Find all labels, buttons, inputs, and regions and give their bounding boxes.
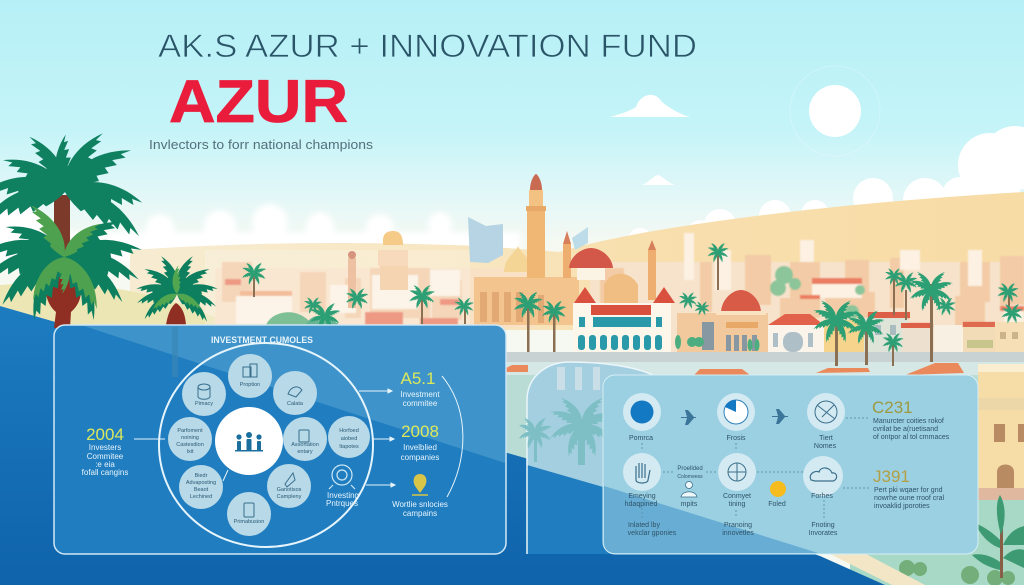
label: investing principles: Investing xyxy=(327,491,359,500)
segment labels: entary xyxy=(297,449,313,455)
segment labels: Beaot xyxy=(194,487,209,493)
stat: J391: invoaklid jporoties xyxy=(874,503,930,510)
segment labels: Advaposting xyxy=(186,480,216,486)
step labels xyxy=(625,435,838,537)
segment labels: Calata xyxy=(287,401,304,407)
step labels: hdaqpined xyxy=(625,501,657,508)
cloud: small upper xyxy=(610,95,690,117)
segment labels: aiobed xyxy=(341,436,357,442)
distant city xyxy=(215,233,1024,358)
waterfront roofs and boats xyxy=(506,363,964,375)
segment labels: noining xyxy=(181,435,199,441)
mosque complex xyxy=(474,174,656,325)
garden at bottom right xyxy=(850,500,1024,585)
icon: globe target xyxy=(728,463,746,481)
plant bottom right xyxy=(972,495,1024,578)
step labels: innovetles xyxy=(722,530,754,537)
step labels: Tiert xyxy=(819,435,833,442)
segment labels: Assortation xyxy=(291,442,319,448)
palm tree: front xyxy=(0,199,143,328)
label: investing principles xyxy=(326,491,359,508)
segment circles xyxy=(168,354,370,536)
far hills xyxy=(130,192,1024,330)
segment labels: Proption xyxy=(240,382,260,388)
stat: 2004: :e eia xyxy=(95,460,115,469)
faded trunk behind glass xyxy=(172,327,178,377)
stat: J391 xyxy=(873,467,944,510)
stat: worldwide: Wortlie snlocies xyxy=(392,500,448,509)
icon: cloud xyxy=(810,468,837,481)
stat: worldwide xyxy=(392,500,448,518)
stat: 2008: Invelblied xyxy=(403,443,437,452)
sun xyxy=(790,66,880,156)
palace with teal arches xyxy=(573,287,675,353)
ring xyxy=(159,343,373,547)
cloud: tiny xyxy=(642,175,675,185)
stat: J391: Pert pki wqaer for gnd xyxy=(874,487,943,494)
panel light diagonal overlay xyxy=(84,326,505,463)
stat: J391: J391 xyxy=(873,467,910,486)
street xyxy=(506,352,1024,375)
stat: C231: cvrilat be a(ruetisand xyxy=(873,426,938,433)
segment labels: Biedr xyxy=(195,473,208,479)
glass tower xyxy=(468,217,503,263)
stat: A5.1: A5.1 xyxy=(401,369,435,388)
tower with small dome in the distant city xyxy=(348,231,408,308)
icon: pie xyxy=(724,400,748,424)
icon: hand xyxy=(636,463,650,483)
stat: A5.1: Investment xyxy=(400,390,440,399)
stat: A5.1 xyxy=(400,369,440,408)
stat: 2004: Investers xyxy=(89,443,121,452)
step labels: Pranoing xyxy=(724,522,752,529)
step labels: tining xyxy=(729,501,745,508)
domed civic building xyxy=(675,290,768,353)
step labels: Frosis xyxy=(726,435,746,442)
panel: investment cumoles xyxy=(54,325,506,554)
step labels: Proellded xyxy=(677,466,703,472)
right buildings xyxy=(824,312,1024,360)
segment labels: Primabusion xyxy=(234,519,264,525)
stat: worldwide: campains xyxy=(403,509,437,518)
blue shade in lower left of panel xyxy=(604,486,818,553)
segment labels: Parfoment xyxy=(177,428,203,434)
panel: outer glass frame xyxy=(517,362,655,554)
segment labels: Ganotisos xyxy=(277,487,302,493)
icon: tools xyxy=(815,401,837,423)
step labels: mpits xyxy=(681,501,698,508)
icon: clock target xyxy=(329,465,355,489)
title: AK.S AZUR + INNOVATION FUND xyxy=(158,28,697,64)
white villa xyxy=(768,314,824,357)
step labels: Foled xyxy=(768,501,786,508)
hub circle with people icon xyxy=(215,407,283,475)
segment labels: Ixit xyxy=(186,449,194,455)
stat: 2008 xyxy=(401,422,439,462)
shrubs bottom right xyxy=(899,560,1015,585)
panel heading: INVESTMENT CUMOLES xyxy=(211,335,313,345)
step labels: Pomrca xyxy=(629,435,653,442)
connectors xyxy=(642,418,870,520)
small city palms xyxy=(241,242,1023,366)
segment icons xyxy=(198,364,309,517)
arrows xyxy=(681,409,788,425)
waterfront below the street xyxy=(506,375,1024,505)
palm tree: small xyxy=(136,253,218,325)
stat: C231: Manurcter coities rokof xyxy=(873,418,944,425)
step labels: Conmyet xyxy=(723,493,751,500)
clouds along the ridge xyxy=(628,126,1024,252)
segment labels: Lechined xyxy=(190,494,212,500)
step labels: vekclar gponies xyxy=(628,530,677,537)
stat: 2004: fofall cangins xyxy=(82,468,128,477)
stat: 2008: 2008 xyxy=(401,422,439,441)
stat: A5.1: commitee xyxy=(403,399,438,408)
stat: 2004: 2004 xyxy=(86,425,124,444)
segment labels xyxy=(176,382,359,525)
step labels: Emeying xyxy=(628,493,656,500)
step labels: Invorates xyxy=(809,530,838,537)
stat: J391: nowrhe oune rroof cral xyxy=(874,495,944,502)
stat: 2004 xyxy=(82,425,128,477)
icon: blue dot xyxy=(630,400,654,424)
segment labels: Pimacy xyxy=(195,401,213,407)
stat: 2008: companies xyxy=(401,453,439,462)
step labels: Forhes xyxy=(811,493,833,500)
person icon xyxy=(681,482,697,497)
yellow dot xyxy=(770,481,786,497)
stat: 2004: Commitee xyxy=(87,452,124,461)
palm tree: top xyxy=(0,126,147,255)
cream edge of diagonal xyxy=(830,554,925,585)
step labels: Colorneess xyxy=(677,474,703,480)
step labels: Fnoting xyxy=(811,522,835,529)
ornate building at right edge xyxy=(978,364,1024,502)
logo: AZUR: AZUR xyxy=(169,68,348,135)
stat: C231: C231 xyxy=(872,398,913,417)
connector lines xyxy=(134,376,463,497)
bridge piers xyxy=(557,367,600,390)
left green slope xyxy=(0,283,240,330)
step labels: Nomes xyxy=(814,443,837,450)
step circles xyxy=(623,393,845,496)
subtitle: Invlectors to forr national champions xyxy=(149,137,374,152)
stat: C231: of ontpor al tol cmmaces xyxy=(873,434,950,441)
blue diagonal foreground xyxy=(0,306,885,585)
stat: C231 xyxy=(872,398,950,441)
step labels: Inlated lby xyxy=(628,522,660,529)
soft clouds on the left xyxy=(0,202,520,262)
segment labels: Horfoed xyxy=(339,428,359,434)
label: investing principles: Pntrques xyxy=(326,499,358,508)
glass tower small xyxy=(572,227,588,250)
faded palm xyxy=(517,394,616,465)
panel: process flow xyxy=(603,375,978,554)
green trees in the distant city xyxy=(266,312,340,325)
icon: location pin xyxy=(412,474,428,495)
segment labels: Campleny xyxy=(277,494,302,500)
segment labels: Castesdion xyxy=(176,442,204,448)
haze over the left of the city xyxy=(205,250,470,325)
segment labels: Itapotes xyxy=(339,444,359,450)
